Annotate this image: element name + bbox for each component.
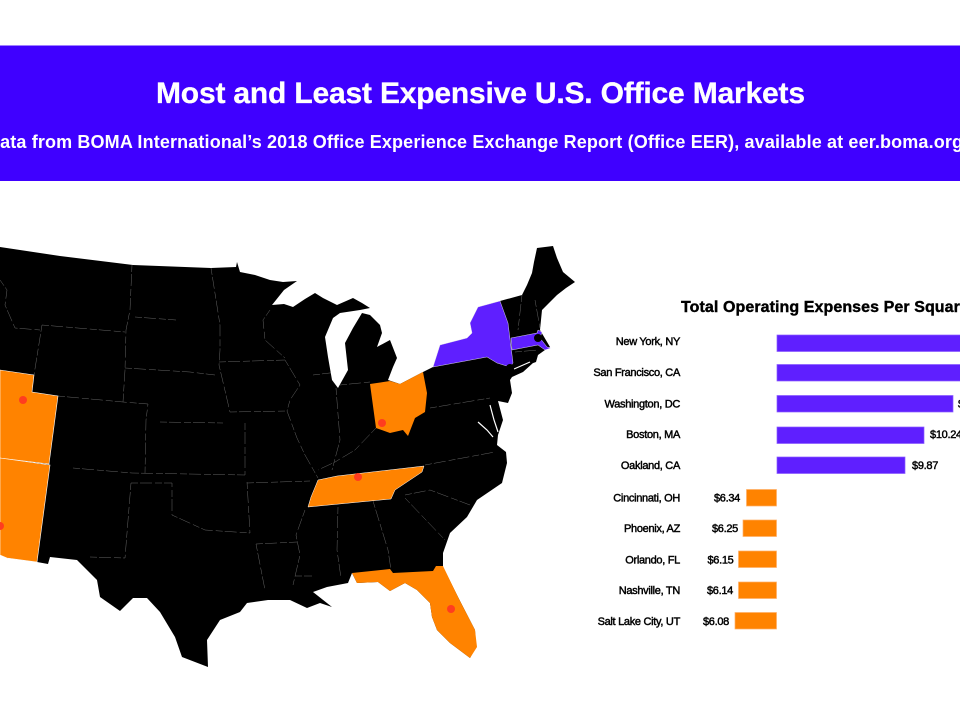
- city marker: Orlando: [447, 605, 455, 613]
- city marker: Nashville: [354, 473, 362, 481]
- row: Cincinnati: $6.34: [714, 492, 740, 504]
- row: Orlando: $6.15: [707, 554, 734, 566]
- city marker: Boston: [534, 334, 542, 342]
- header banner: [0, 46, 960, 181]
- state: Florida: [352, 566, 477, 658]
- row: Salt Lake City: [598, 612, 776, 629]
- state: New York: [433, 301, 513, 367]
- bar chart: total operating expenses: [593, 299, 960, 629]
- state: Arizona: [0, 458, 50, 562]
- row: Boston: [626, 427, 960, 444]
- continental US base: [0, 246, 575, 667]
- row: Washington: Washington, DC: [605, 398, 680, 410]
- row: Nashville: [619, 582, 776, 598]
- row: San Francisco: San Francisco, CA: [593, 367, 681, 379]
- row: Nashville: $6.14: [707, 585, 733, 597]
- city marker: New York: [506, 364, 514, 372]
- row: Washington: [605, 396, 960, 412]
- city marker: Salt Lake City: [19, 396, 27, 404]
- row: Phoenix: $6.25: [712, 523, 738, 535]
- row: New York: New York, NY: [616, 336, 681, 348]
- row: Oakland: $9.87: [912, 460, 938, 472]
- city marker: Cincinnati: [378, 419, 386, 427]
- row: Orlando: Orlando, FL: [625, 554, 680, 566]
- row: Oakland: Oakland, CA: [621, 460, 681, 472]
- state: Ohio: [370, 372, 427, 436]
- subtitle: Data from BOMA International’s 2018 Office Experience Exchange Report (Office EER), available at eer.boma.org: [0, 132, 960, 152]
- row: Orlando: [625, 551, 776, 568]
- state: Tennessee: [308, 466, 424, 507]
- row: Salt Lake City: $6.08: [703, 616, 729, 628]
- row: San Francisco: [593, 364, 960, 381]
- coastal inlets: [478, 362, 530, 437]
- row: New York: [616, 335, 960, 352]
- row: Nashville: Nashville, TN: [619, 585, 680, 597]
- row: Cincinnati: [613, 490, 776, 506]
- state border lines: [0, 265, 540, 590]
- row: Phoenix: Phoenix, AZ: [624, 523, 681, 535]
- row: Salt Lake City: Salt Lake City, UT: [598, 616, 681, 628]
- city marker: Phoenix: [0, 522, 4, 530]
- map: United States: [0, 246, 575, 667]
- title: Most and Least Expensive U.S. Office Markets: [156, 77, 805, 110]
- state: Utah: [0, 370, 58, 464]
- row: Boston: Boston, MA: [626, 429, 681, 441]
- row: Cincinnati: Cincinnati, OH: [613, 492, 680, 504]
- row: Oakland: [621, 457, 938, 474]
- state: Massachusetts: [511, 330, 551, 350]
- row: Phoenix: [624, 520, 776, 536]
